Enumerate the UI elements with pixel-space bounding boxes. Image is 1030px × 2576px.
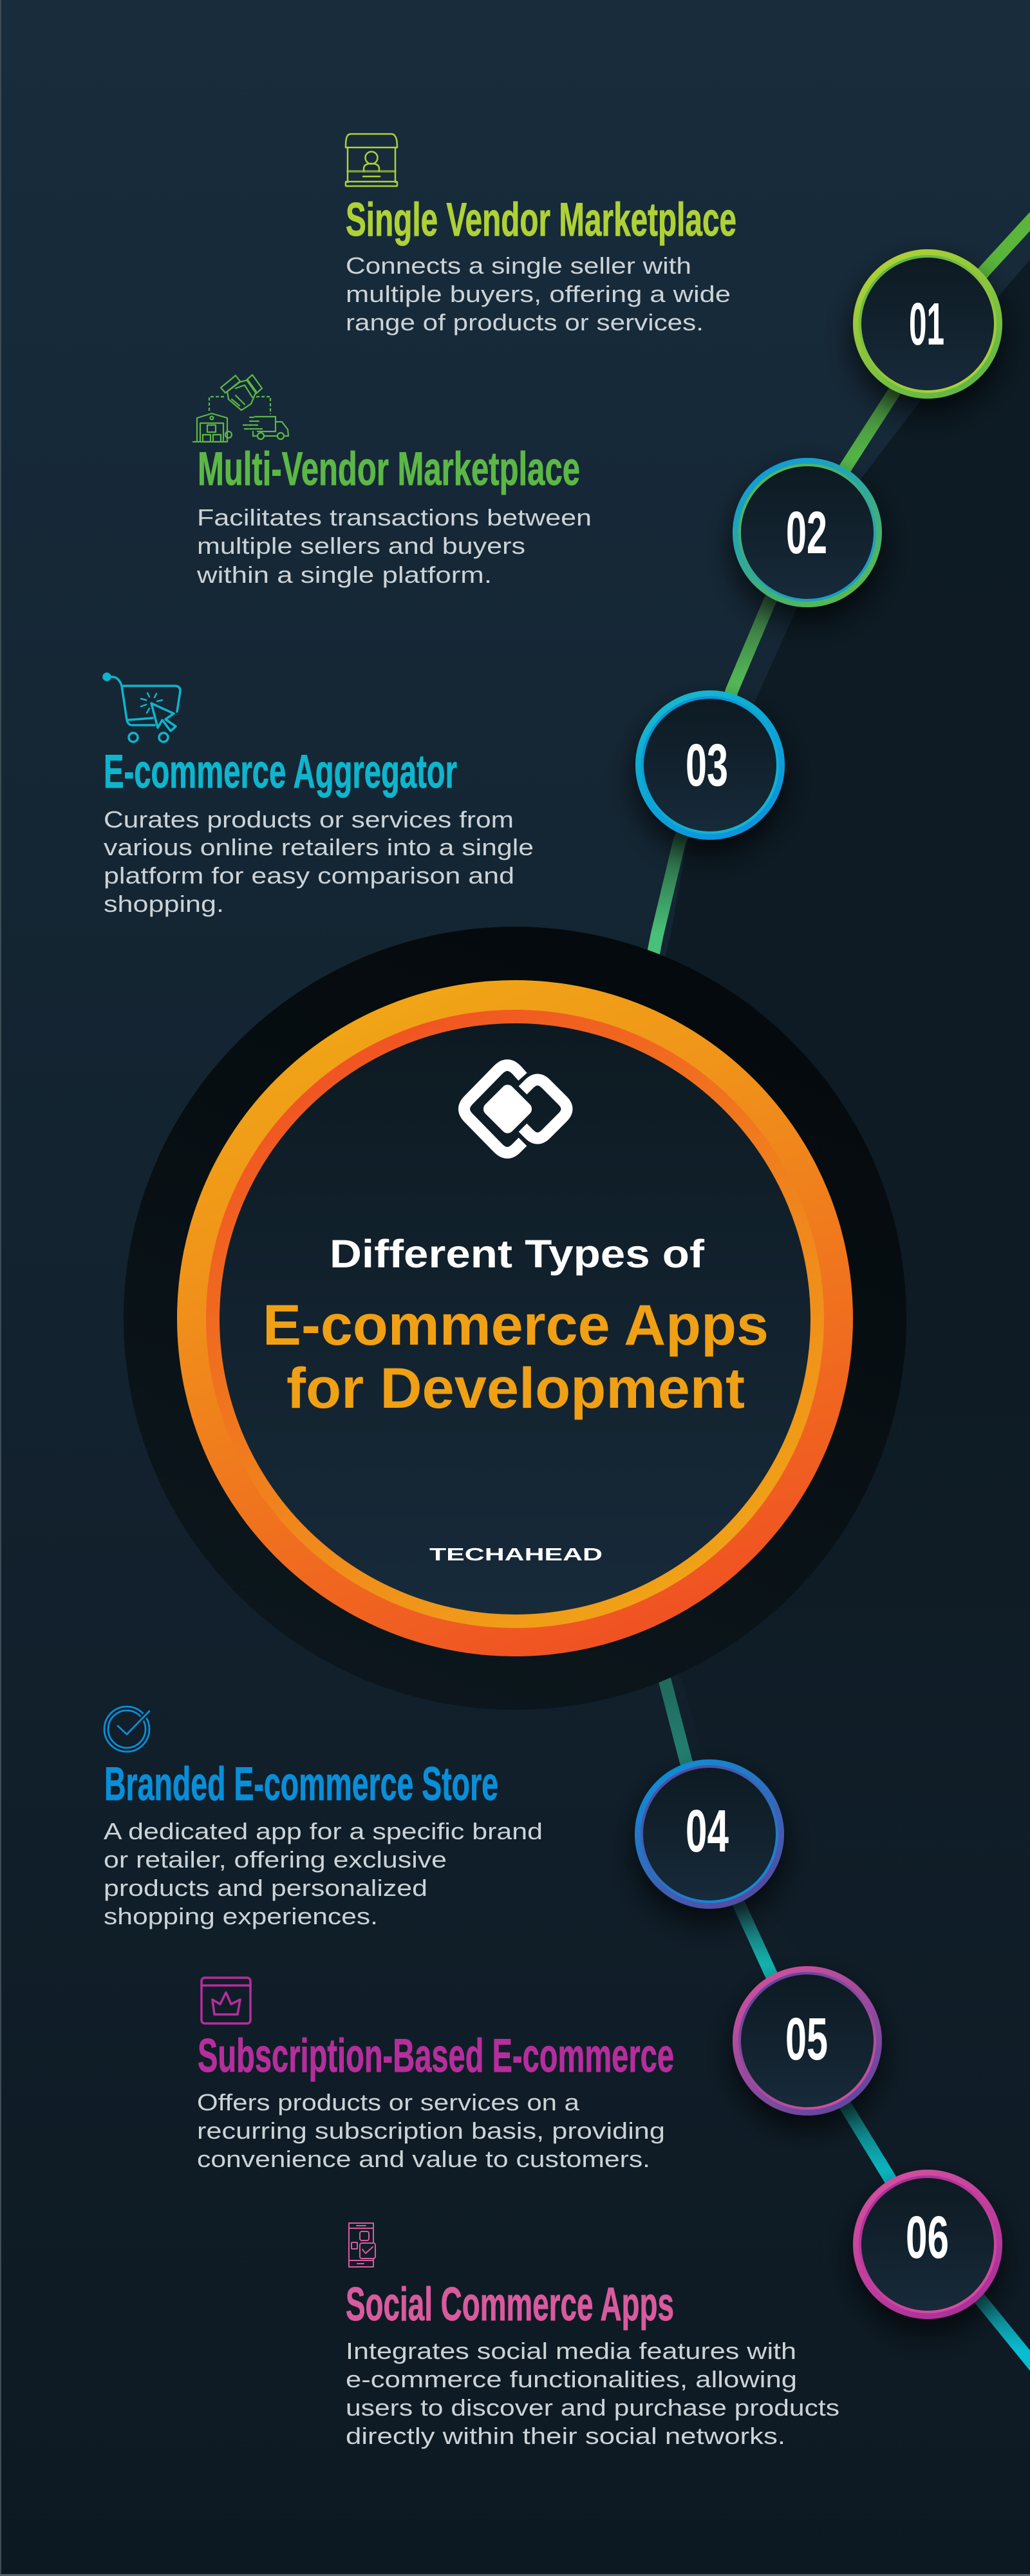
description: Connects a single seller with (346, 252, 691, 279)
number badge 02 (733, 458, 882, 607)
description: various online retailers into a single (104, 834, 534, 860)
description: products and personalized (104, 1875, 427, 1901)
icon: storefront (346, 134, 397, 186)
description (346, 2338, 839, 2449)
description (197, 2089, 665, 2172)
number badge 06 (853, 2170, 1002, 2319)
icon: target with checkmark (104, 1707, 149, 1752)
number badge 04: 04 (686, 1797, 729, 1864)
description: recurring subscription basis, providing (197, 2117, 665, 2144)
description: range of products or services. (346, 309, 704, 336)
heading: Branded E-commerce Store (104, 1758, 498, 1810)
title line 3: for Development (286, 1356, 745, 1420)
description: Integrates social media features with (346, 2338, 796, 2364)
description: convenience and value to customers. (197, 2146, 650, 2172)
description (104, 1818, 543, 1929)
description: within a single platform. (196, 562, 492, 588)
description: Offers products or services on a (197, 2089, 580, 2116)
description (104, 806, 534, 917)
description: directly within their social networks. (346, 2423, 785, 2449)
heading: E-commerce Aggregator (104, 746, 457, 798)
description: A dedicated app for a specific brand (104, 1818, 543, 1844)
description (196, 504, 592, 588)
description: e-commerce functionalities, allowing (346, 2366, 797, 2392)
icon: logo mark (464, 1065, 566, 1153)
number badge 01 (853, 249, 1002, 399)
heading: Subscription-Based E-commerce (198, 2030, 674, 2082)
number badge 02: 02 (786, 499, 827, 566)
description: shopping experiences. (104, 1903, 378, 1929)
description: Curates products or services from (104, 806, 514, 833)
icon: shopping cart with cursor (104, 674, 180, 742)
description: multiple buyers, offering a wide (346, 281, 731, 307)
curved timeline path (647, 207, 1030, 2376)
title line 2: E-commerce Apps (263, 1293, 769, 1357)
heading: Multi-Vendor Marketplace (198, 443, 580, 495)
description: users to discover and purchase products (346, 2394, 839, 2421)
brand wordmark: TECHAHEAD (429, 1544, 603, 1564)
title line 1: Different Types of (330, 1232, 705, 1276)
panel: e-commerce aggregator (104, 674, 534, 917)
panel: single vendor marketplace (346, 134, 736, 336)
description: multiple sellers and buyers (197, 533, 525, 559)
description (346, 252, 731, 336)
icon: window with crown (201, 1978, 250, 2023)
description: or retailer, offering exclusive (104, 1846, 447, 1873)
description: Facilitates transactions between (197, 504, 592, 531)
number badge 05: 05 (785, 2005, 828, 2072)
panel: branded e-commerce store (104, 1707, 543, 1929)
heading: Single Vendor Marketplace (346, 194, 736, 246)
icon: phone with checkmark (349, 2223, 375, 2267)
central circle badge (124, 927, 906, 1710)
heading: Social Commerce Apps (346, 2278, 674, 2331)
description: shopping. (104, 891, 224, 917)
panel: subscription-based e-commerce (197, 1978, 674, 2172)
panel: multi-vendor marketplace (193, 375, 592, 588)
number badge 05 (733, 1966, 882, 2116)
description: platform for easy comparison and (104, 862, 514, 889)
number badge 06: 06 (906, 2204, 949, 2271)
number badge 03 (635, 690, 785, 840)
number badge 01: 01 (909, 290, 944, 357)
panel: social commerce apps (346, 2223, 839, 2449)
icon: handshake, warehouse and truck (193, 375, 288, 442)
number badge 03: 03 (686, 732, 728, 799)
number badge 04 (635, 1759, 784, 1909)
